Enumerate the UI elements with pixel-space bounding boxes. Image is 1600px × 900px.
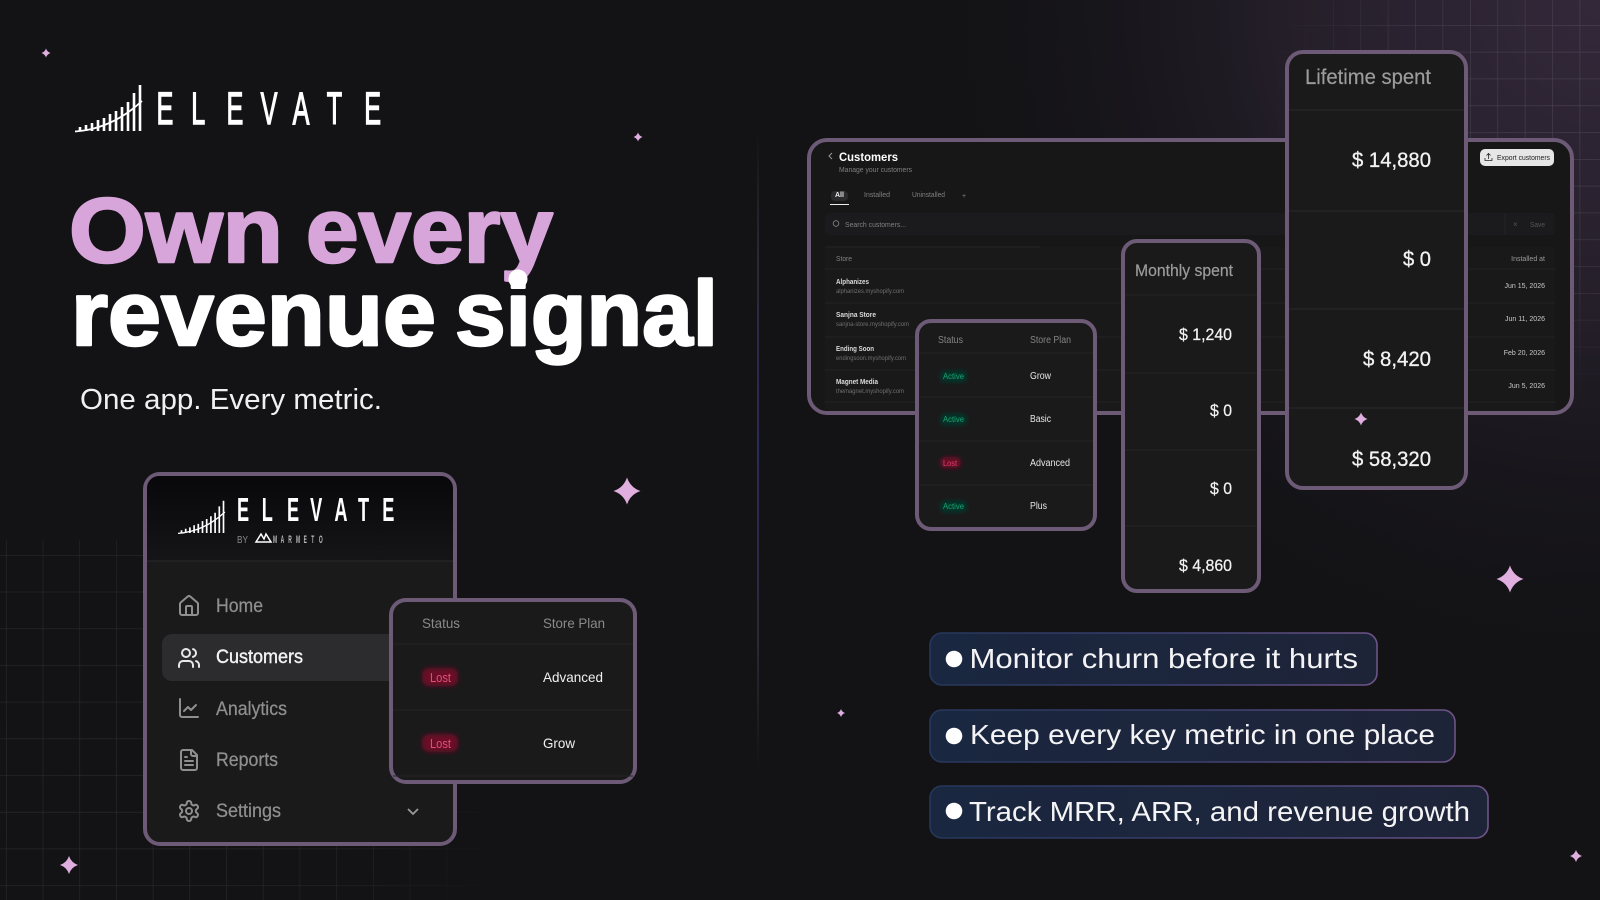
by marmeto: BY xyxy=(237,535,248,546)
sidebar wordmark: ELEVATE xyxy=(237,491,394,528)
lifetime values xyxy=(1352,149,1431,471)
nav: analytics: Analytics xyxy=(216,699,287,720)
plan value: grow: Grow xyxy=(543,735,576,751)
button: export customers xyxy=(1480,149,1554,166)
callout: track growth: Track MRR, ARR, and revenue growth xyxy=(969,796,1470,827)
tabs xyxy=(830,191,966,205)
row: active plus: Plus xyxy=(1030,501,1047,512)
panel: status overlay (lost) xyxy=(391,600,635,782)
row: active basic: Basic xyxy=(1030,414,1051,425)
lifetime values: $ 8,420 xyxy=(1363,348,1431,371)
icon: sidebar logo bars xyxy=(178,501,225,533)
row: active grow: Grow xyxy=(1030,371,1052,382)
badge: lost row 1: Lost xyxy=(430,670,451,685)
page heading: Customers xyxy=(839,150,898,164)
status header: Status xyxy=(422,615,460,631)
active row highlight xyxy=(162,634,395,681)
plan value: advanced: Advanced xyxy=(543,669,603,685)
logo wordmark: ELEVATE xyxy=(156,83,381,134)
badge: lost row 1 xyxy=(422,668,458,686)
tabs: Uninstalled xyxy=(912,192,945,199)
nav: home: Home xyxy=(216,596,263,617)
callout: track growth xyxy=(930,786,1488,838)
row: active grow: Active xyxy=(943,372,965,381)
table rows: endingsoon.myshopify.com xyxy=(836,356,906,362)
search bar: Save xyxy=(1530,222,1545,229)
subtitle: One app. Every metric. xyxy=(80,384,382,416)
by marmeto xyxy=(237,533,323,546)
title line 1: Own xyxy=(69,180,283,282)
column: installed at: Installed at xyxy=(1511,256,1545,263)
title line 1: every xyxy=(306,180,553,282)
row: active plus: Active xyxy=(943,502,965,511)
plan header: Store Plan xyxy=(543,615,605,631)
table headers: Status xyxy=(938,335,963,346)
nav: analytics xyxy=(180,699,287,720)
nav: reports: Reports xyxy=(216,750,278,771)
panel: sidebar navigation xyxy=(145,474,455,844)
page heading: Manage your customers xyxy=(839,167,912,174)
table rows: alphanizes.myshopify.com xyxy=(836,289,904,295)
table rows: Store xyxy=(836,256,852,263)
panel: monthly spent xyxy=(1123,241,1259,591)
title xyxy=(69,180,718,365)
lifetime values: $ 0 xyxy=(1403,248,1431,271)
monthly heading: Monthly spent xyxy=(1135,261,1233,280)
callout: monitor churn xyxy=(930,633,1377,685)
title line 1 xyxy=(69,180,553,282)
lifetime heading: Lifetime spent xyxy=(1305,66,1431,89)
row: active grow xyxy=(940,371,1052,382)
callout: key metrics: Keep every key metric in one place xyxy=(970,719,1435,750)
row: active basic: Active xyxy=(943,415,965,424)
tabs: + xyxy=(962,193,966,200)
nav: settings xyxy=(180,801,418,822)
search bar: × xyxy=(1513,220,1518,229)
column: installed at: Feb 20, 2026 xyxy=(1504,350,1545,357)
row: active plus xyxy=(940,501,1047,512)
sidebar header xyxy=(147,476,453,561)
by marmeto: MARMETO xyxy=(273,533,323,546)
tabs: All xyxy=(835,192,844,199)
column: installed at xyxy=(1504,256,1545,390)
lifetime values: $ 58,320 xyxy=(1352,448,1431,471)
tabs: Installed xyxy=(864,192,890,199)
monthly values xyxy=(1179,325,1232,575)
column: installed at: Jun 11, 2026 xyxy=(1505,316,1545,323)
logo: ELEVATE xyxy=(75,83,381,134)
monthly values: $ 4,860 xyxy=(1179,556,1232,575)
monthly values: $ 0 xyxy=(1210,401,1232,420)
search bar xyxy=(825,213,1555,235)
icon: sparkle xyxy=(1354,412,1368,426)
row: lost advanced: Advanced xyxy=(1030,458,1070,469)
table rows: sanjna-store.myshopify.com xyxy=(836,322,909,328)
row: lost advanced xyxy=(940,457,1070,469)
row: lost advanced: Lost xyxy=(943,459,958,468)
panel: customers table xyxy=(809,140,1572,413)
panel: status and store plan xyxy=(917,321,1095,529)
search bar: Search customers... xyxy=(845,222,906,229)
nav: customers xyxy=(179,647,303,668)
table rows xyxy=(825,247,1555,411)
table rows: Sanjna Store xyxy=(836,312,876,319)
table rows: Ending Soon xyxy=(836,346,874,353)
table rows: themagnet.myshopify.com xyxy=(836,389,904,395)
title line 2: signal xyxy=(455,263,718,365)
column: installed at: Jun 5, 2026 xyxy=(1508,383,1545,390)
row: active basic xyxy=(940,414,1051,425)
callout: monitor churn: Monitor churn before it hurts xyxy=(970,643,1358,674)
badge: lost row 2 xyxy=(422,734,458,752)
table headers: Store Plan xyxy=(1030,335,1071,346)
monthly values: $ 1,240 xyxy=(1179,325,1232,344)
nav: settings: Settings xyxy=(216,801,281,822)
title line 2 xyxy=(71,263,718,365)
lifetime values: $ 14,880 xyxy=(1352,149,1431,172)
icon: logo bars xyxy=(75,85,142,132)
button: export customers: Export customers xyxy=(1497,153,1550,162)
table rows: Alphanizes xyxy=(836,279,869,286)
page heading xyxy=(829,150,912,174)
table rows: Magnet Media xyxy=(836,379,878,386)
callout: key metrics xyxy=(930,710,1455,762)
nav: customers: Customers xyxy=(216,647,303,668)
title line 2: revenue xyxy=(71,263,436,365)
nav: reports xyxy=(181,750,278,771)
badge: lost row 2: Lost xyxy=(430,736,451,751)
panel: lifetime spent xyxy=(1287,52,1466,488)
monthly values: $ 0 xyxy=(1210,479,1232,498)
nav: home xyxy=(180,596,263,617)
column: installed at: Jun 15, 2026 xyxy=(1505,283,1545,290)
table headers xyxy=(938,335,1071,346)
